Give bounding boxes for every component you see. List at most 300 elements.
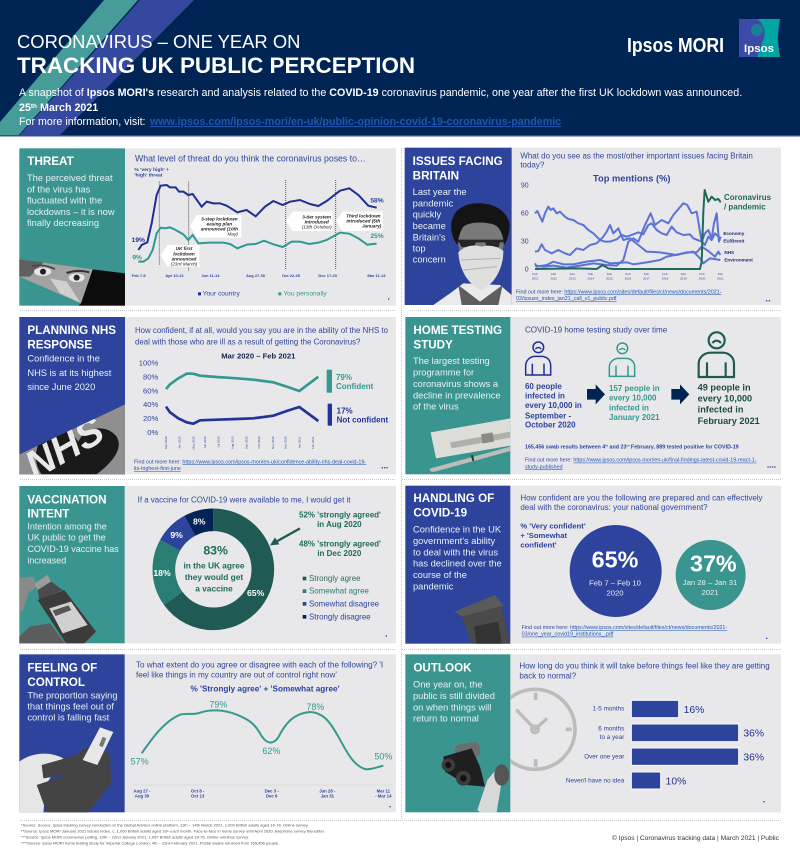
line chart: top mentions: NHS [724,250,734,255]
callout: 3-tier system [286,212,333,231]
line chart: NHS confidence: Feb 2021 [311,436,315,449]
line chart: out of control: Jan 31 [321,794,335,799]
callout: UK first lockdown: lockdown [173,251,195,256]
question: If a vaccine for COVID-19 were available to me, I would get it [138,496,351,505]
stat: February 2021: infected in [698,405,744,415]
description: pandemic [413,198,453,208]
line chart: top mentions: 2011 [532,276,539,280]
line chart: threat over time: Mar 11-14 [367,273,386,278]
heading: OUTLOOK [413,662,472,675]
stat circle: 37% [676,540,746,610]
question: What level of threat do you think the coronavirus poses to… [135,154,366,164]
bar chart: time to normal [566,700,764,789]
description: increased [27,555,66,565]
stat circle: 37%: Jan 28 – Jan 31 [683,578,737,587]
description: has declined over the [413,559,502,569]
heading: BRITAIN [413,170,459,183]
stat: February 2021: February 2021 [698,416,760,426]
description [413,525,502,591]
line chart: NHS confidence: Jan 2021 [297,436,301,449]
stat: January 2021 [609,343,660,422]
description: programme for [413,368,474,378]
line chart: top mentions: 2014 [587,276,594,280]
callout: UK first lockdown: (23rd March) [171,261,198,266]
arrow [671,384,689,404]
stat: February 2021 [698,332,760,426]
description [27,690,118,723]
heading: THREAT [27,155,74,168]
line chart: top mentions: EU/Brexit [723,238,745,243]
description: of the virus has [27,184,91,194]
line chart: top mentions: Feb [607,272,612,276]
donut chart: 8% [193,517,206,527]
description: on when things will [413,702,491,712]
source link: Find out more here: https://www.ipsos.com/sites/default/files/ct/news/documents/2021- [516,289,722,295]
legend [303,574,380,621]
panel dividers [20,148,781,820]
line chart: threat over time: Jun 11-14 [201,273,220,278]
stat: February 2021: 49 people in [698,382,751,392]
legend: Strongly agree [309,574,361,583]
heading [413,324,502,351]
panel: home testing study [405,317,781,474]
note: measure: confident' [520,541,557,550]
description: to deal with the virus [413,548,498,558]
line chart: out of control: Oct 13 [191,794,205,799]
line chart: NHS confidence: Dec 2020 [284,436,288,449]
bar chart: time to normal: to a year [600,734,624,741]
line chart: NHS confidence: Jun 2020 [203,436,207,449]
copyright line: © Ipsos | Coronavirus tracking data | March 2021 | Public [612,834,780,842]
question [135,326,389,346]
stat circle: 37%: 37% [690,551,737,577]
heading [413,155,503,183]
callout: strongly agreed: in Dec 2020 [317,549,362,558]
header banner [0,0,800,136]
study note: th [605,444,608,448]
line chart: threat over time [132,167,386,278]
description: decline in prevalence [413,390,501,400]
line chart: NHS confidence: Jul 2020 [217,436,221,448]
photo: gloved hand with test [19,727,113,812]
line chart: top mentions: 2019 [680,276,687,280]
description [413,187,467,265]
heading [27,662,97,689]
bar chart: time to normal: 10% [666,776,686,787]
title: TRACKING UK PUBLIC PERCEPTION [17,53,415,78]
line chart: top mentions: 60 [521,210,529,217]
intro text: www.ipsos.com/ipsos-mori/en-uk/public-opinion-covid-19-coronavirus-pandemic [149,116,561,128]
line chart: top mentions: 30 [521,238,529,245]
line chart: top mentions: Feb [681,272,686,276]
line chart: top mentions: Feb [532,272,538,276]
footnotes [21,822,325,846]
heading: HOME TESTING [413,324,502,337]
bar chart: time to normal: 36% [743,752,764,763]
line chart: top mentions: Coronavirus [724,193,772,202]
heading [27,493,107,520]
question: How confident are you the following are prepared and can effectively [520,494,763,503]
source link [522,625,727,638]
description: finally decreasing [27,218,99,228]
line chart: threat over time: Feb 7-9 [132,273,146,278]
line chart: NHS confidence: Mar 2020 – Feb 2021 [221,352,296,361]
description: control is falling fast [27,713,110,723]
callout: strongly agreed: 52% 'strongly agreed' [299,510,381,519]
study note: 165,456 swab results between 4 [525,444,605,450]
intro text: For more information, visit: [19,116,146,128]
line chart: threat over time: Dec 17-20 [318,273,338,278]
question: feel like things in my country are out of control right now' [136,670,337,679]
callout: 3-step plan: 3-step lockdown [201,216,238,221]
footnotes: ****Source: Ipsos MORI home testing study for Imperial College London, 4th – 23rd February 2021. Postal swabs returned from 165,456 people. [21,840,279,846]
legend [198,291,327,298]
source link: Find out more here: https://www.ipsos.com/ipsos-mori/en-uk/final-findings-latest-covid-19-react-1- [525,458,757,464]
callout: third lockdown [336,212,383,231]
intro text [19,87,742,128]
callout: strongly agreed: in Aug 2020 [317,520,362,529]
description: course of the [413,570,467,580]
line chart: out of control: 62% [262,746,280,756]
line chart: NHS confidence: 40% [143,400,159,409]
donut chart: 9% [170,530,183,540]
line chart: threat over time: % 'very high' + [134,167,169,173]
line chart: top mentions: Economy [723,231,745,236]
description: Confidence in the [27,354,100,364]
source link: Find out more here: https://www.ipsos.com/sites/default/files/ct/news/documents/2021- [522,625,727,631]
line chart: top mentions: 2018 [662,276,669,280]
stat circle: 65%: Feb 7 – Feb 10 [589,579,641,588]
bar chart: time to normal: 1-5 months [593,706,624,713]
heading: STUDY [413,338,453,351]
description: top [413,244,426,254]
line chart: top mentions: / pandemic [724,203,766,212]
line chart: top mentions: Feb [662,272,668,276]
panel: outlook [405,654,781,812]
line chart: top mentions: 0 [525,267,529,274]
line chart: top mentions: Feb [625,272,631,276]
line chart: threat over time: 19% [132,237,145,244]
description [413,356,501,411]
stat: September-October 2020 [525,342,582,430]
line chart: out of control: Aug 30 [135,794,150,799]
line chart: NHS confidence: 20% [143,414,159,423]
callout: 3-tier system: 3-tier system [302,214,331,219]
line chart: out of control: Aug 27 - [133,788,151,793]
panel: handling of COVID-19 [405,486,781,644]
line chart: top mentions: 90 [521,182,529,189]
source link: 02/issues_index_jan21_call_v1_public.pdf [516,296,617,302]
description [27,173,115,228]
title [17,31,415,78]
stat circle: 37%: 2021 [701,588,719,597]
question: today? [520,161,545,170]
intro text: March 2021 [37,102,98,114]
callout: 3-step plan: easing plan [207,221,232,226]
source link: 03/one_year_covid19_institutions_.pdf [522,632,614,638]
bar chart: time to normal: Over one year [584,753,624,760]
description: lockdowns – it is now [27,207,115,217]
stat: January 2021: every 10,000 [609,394,657,403]
callout: UK first lockdown [161,245,199,267]
line chart: NHS confidence: Confident [336,382,374,391]
bar chart: time to normal: Never/I have no idea [566,777,625,784]
study note: February, 889 tested positive for COVID-19 [629,444,739,450]
note: measure: % 'Very confident' [520,521,586,530]
photo: man in mask [433,203,512,305]
line chart: top mentions: Feb [699,272,705,276]
line chart: top mentions: Feb [644,272,649,276]
photo: lectern [454,594,510,644]
line chart: threat over time: 'high' threat [134,173,163,179]
line chart: out of control: Dec 3 - [265,788,279,793]
donut chart: in the UK agree [183,561,245,571]
description: The perceived threat [27,173,113,183]
description: The largest testing [413,356,490,366]
footnotes: ***Source: Ipsos MORI coronavirus polling, 19th – 22nd January 2021. 1,067 British adults aged 18-75. Online omnibus survey. [21,834,249,840]
line chart: top mentions: Feb [551,272,557,276]
photo: binoculars [442,741,509,812]
stat: September-October 2020: every 10,000 in [525,401,582,410]
source link: Find out more here: https://www.ipsos.com/ipsos-mori/en-uk/confidence-ability-nhs-deal-covid-19- [134,459,366,465]
heading: INTENT [27,507,69,520]
photo: NHS heart on pavement: NHS [17,408,111,488]
panel: threat [19,148,396,306]
callout: 3-tier system: introduced [305,219,329,224]
donut chart: they would get [185,572,243,582]
callout: third lockdown: introduced (5th [346,218,380,223]
source link [516,289,722,302]
line chart: top mentions: Environment [724,258,753,263]
callout: strongly agreed: 48% 'strongly agreed' [299,539,381,548]
description: fluctuated with the [27,196,102,206]
description: Intention among the [27,521,107,531]
callout: UK first lockdown: UK first [176,246,193,251]
stat: September-October 2020: September - [525,411,571,420]
bar chart: time to normal: 16% [684,705,704,716]
line chart: threat over time: 9% [132,254,142,261]
description: coronavirus shows a [413,379,499,389]
heading: PLANNING NHS [27,324,116,337]
line chart: top mentions: 2020 [699,276,706,280]
stat circle: 65%: 2020 [606,589,624,598]
stat: January 2021: 157 people in [609,384,660,393]
panel: planning NHS response [17,317,396,488]
heading: CONTROL [27,676,85,689]
line chart: out of control: 57% [131,756,149,766]
heading: FEELING OF [27,662,97,675]
line chart: out of control: Jan 28 - [319,788,336,793]
Ipsos logo: Ipsos [744,43,774,55]
photo: NHS heart on pavement [20,404,125,474]
legend: Somewhat agree [309,587,369,596]
line chart: top mentions: Top mentions (%) [593,174,671,184]
title: CORONAVIRUS – ONE YEAR ON [17,31,300,52]
panel: issues facing Britain [405,148,781,305]
line chart: top mentions: 2021 [717,276,724,280]
line chart: NHS confidence: 0% [147,428,159,437]
line chart: NHS confidence: 100% [139,359,159,368]
Ipsos MORI wordmark: Ipsos MORI [627,35,724,57]
description: of the virus [413,401,459,411]
line chart: out of control: 79% [209,699,227,709]
callout: 3-step plan: announced (10th [201,226,238,231]
description: pandemic [413,581,454,591]
line chart: top mentions: 2013 [569,276,576,280]
callout: strongly agreed [270,510,381,558]
stat: September-October 2020: 60 people [525,382,562,391]
arrow [587,384,605,404]
question: What do you see as the most/other important issues facing Britain [520,151,753,160]
stat: September-October 2020: October 2020 [525,421,576,430]
study note: rd [626,444,630,448]
callout: UK first lockdown: announced [172,256,197,261]
photo: eyes peering [19,259,125,306]
question: deal with the coronavirus: your national government? [520,503,708,512]
line chart: top mentions: Feb [588,272,594,276]
question: How long do you think it will take before things feel like they are getting [519,662,770,671]
heading: COVID-19 [413,507,468,520]
legend: Your country [203,291,240,298]
stat circle: 65%: 65% [592,546,639,572]
description: public is still divided [413,691,495,701]
line chart: NHS confidence [139,352,388,449]
line chart: out of control [131,685,393,799]
line chart: NHS confidence: Apr 2020 [178,436,182,448]
Ipsos logo [739,19,780,57]
line chart: out of control: % 'Strongly agree' + 'Somewhat agree' [190,685,340,694]
donut chart: 18% [153,568,171,578]
question: How confident, if at all, would you say you are in the ability of the NHS to [135,326,389,335]
donut chart: 65% [247,588,265,598]
heading [27,324,116,351]
line chart: NHS confidence: Aug 2020 [231,436,235,449]
legend: Somewhat disagree [309,599,380,608]
line chart: NHS confidence: Oct 2020 [257,436,261,448]
question: To what extent do you agree or disagree with each of the following? 'I [136,660,383,669]
description: return to normal [413,713,479,723]
line chart: out of control: 50% [374,751,392,761]
question: back to normal? [519,671,577,680]
donut chart: 83% [203,544,228,558]
stat: January 2021: infected in [609,403,649,412]
line chart: NHS confidence: 79% [336,373,352,382]
donut chart: a vaccine [195,584,233,594]
line chart: out of control: Mar 11 [377,788,391,793]
question: deal with those who are ill as a result of getting the Coronavirus? [135,337,361,346]
clock icon [510,688,577,772]
study note: and 23 [608,444,626,450]
source link [525,458,757,470]
footnotes: *Source: Source: Ipsos tracking survey conducted on the Global Advisor online platform, 11th – 14th March 2021, 1,000 British adults aged 16-74. Online survey. [21,822,309,828]
description: The proportion saying [27,690,118,700]
panel: feeling of control [19,654,396,812]
callout: 3-tier system: (13th October) [302,224,332,229]
footnotes: **Source: Ipsos MORI January 2021 Issues Index, c. 1,000 British adults aged 18+ each month. Face-to-face in home survey until April 2020, telephone survey thereafter. [21,828,325,834]
line chart: top mentions: Feb [718,272,723,276]
line chart: top mentions: 2015 [606,276,613,280]
description: UK public to get the [27,533,106,543]
note: measure: + 'Somewhat [520,531,567,540]
donut chart [153,517,265,619]
line chart: top mentions: 2012 [550,276,557,280]
stat: February 2021: every 10,000 [698,394,752,404]
line chart: NHS confidence: 80% [143,372,159,381]
line chart: NHS confidence: 60% [143,386,159,395]
heading: HANDLING OF [413,492,494,505]
line chart: NHS confidence: May 2020 [192,436,196,449]
description: Confidence in the UK [413,525,502,535]
stat circle: 65% [570,525,662,617]
description [27,521,119,565]
legend: Strongly disagree [309,612,371,621]
line chart: NHS confidence: Not confident [337,415,388,424]
bar chart: time to normal: 6 months [598,725,624,732]
intro text: A snapshot of Ipsos MORI's research and analysis related to the COVID-19 coronavirus pandemic, one year after the first UK lockdown was announced. [19,87,742,99]
description: government's ability [413,536,495,546]
photo: vaccine vial [19,575,96,643]
description: One year on, the [413,680,482,690]
heading: RESPONSE [27,338,92,351]
callout: third lockdown: Third lockdown [346,213,381,218]
source link: study-published [525,464,563,470]
line chart: threat over time: 25% [370,233,384,240]
line chart: top mentions: 2016 [625,276,632,280]
description: became [413,221,446,231]
question: COVID-19 home testing study over time [525,326,668,335]
line chart: NHS confidence: Nov 2020 [271,436,275,449]
line chart: threat over time: Aug 27-30 [246,273,266,278]
heading [413,492,494,520]
source link [134,459,366,472]
description: COVID-19 vaccine has [27,544,119,554]
line chart: NHS confidence: Sep 2020 [244,436,248,449]
line chart: out of control: Oct 8 - [191,788,205,793]
description: quickly [413,210,442,220]
line chart: out of control: - Mar 14 [375,794,392,799]
callout: 3-step plan: May) [227,232,238,237]
line chart: threat over time: Oct 22-25 [282,273,301,278]
line chart: threat over time: 58% [370,197,384,204]
question [136,660,383,679]
intro text: 25 [19,102,31,114]
description: Last year the [413,187,467,197]
line chart: out of control: Dec 6 [266,794,278,799]
description: concern [413,255,446,265]
line chart: NHS confidence: 17% [337,406,353,415]
line chart: top mentions: Feb [570,272,575,276]
description: NHS is at its highest [27,368,112,378]
callout: third lockdown: January) [362,224,382,229]
description [413,680,495,723]
heading: ISSUES FACING [413,155,503,168]
line chart: out of control: 78% [306,702,324,712]
description: since June 2020 [27,382,95,392]
question [520,151,753,170]
question [519,662,770,680]
line chart: top mentions: 2017 [643,276,650,280]
panel: vaccination intent [19,486,396,643]
description: that things feel out of [27,701,114,711]
question [520,494,763,512]
callout: 3-step plan [190,215,241,238]
stat: September-October 2020: infected in [525,391,565,400]
legend: You personally [283,291,327,298]
line chart: top mentions [521,174,772,280]
description [27,354,112,392]
heading: VACCINATION [27,493,107,506]
source link: its-highest-first-june [134,466,181,472]
